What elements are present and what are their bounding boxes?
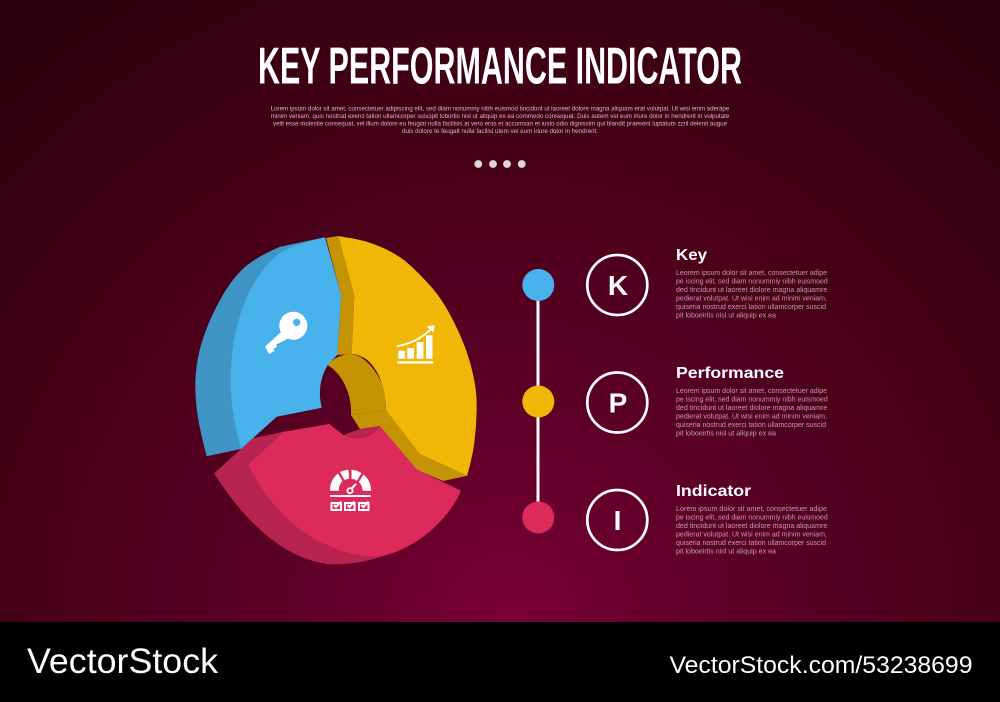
item: Indicator: pit loboeirtis nisl ut aliquip ex ea: [676, 548, 776, 556]
intro paragraph: velit esse molestie consequat, vel illum dolore eu feugiat nulla facilisis at vero eros et accumsan et iusto odio dignissim qui blandit praesent luptatum zzril delenit augue: [273, 120, 727, 127]
item: Key: K: [608, 270, 628, 301]
intro paragraph: duis dolore te feugait nulla facilisi utem vel eum iriure dolor in hendrerit.: [402, 128, 598, 135]
item: Indicator: pe iscing elit, sed diam nonummiy nibh euismoed: [676, 514, 828, 522]
segment: yellow performance: [326, 236, 477, 481]
item: Key: pit loboeirtis nisl ut aliquip ex ea: [676, 312, 776, 320]
timeline node: blue: [522, 269, 554, 301]
item: Indicator: Lorem ipsum dolor sit amet, consectetuer adipe: [676, 506, 827, 513]
item: Key: pe iscing elit, sed diam nonummiy nibh euismoed: [676, 278, 828, 286]
item: Indicator: I: [614, 505, 621, 536]
item: Key: ded tincidunt ut laoreet diolore magna aliquamre: [676, 287, 827, 294]
pagination dots: [474, 160, 526, 168]
timeline node: yellow: [522, 386, 554, 418]
footer bar: [0, 622, 1000, 702]
item: Performance: pe iscing elit, sed diam nonummiy nibh euismoed: [676, 396, 828, 404]
item: Key: [587, 247, 828, 320]
item: Performance: ded tincidunt ut laoreet diolore magna aliquamre: [676, 405, 827, 412]
item: Key: quiseria nostrud exerci tation ullamcorper suscid: [676, 304, 826, 311]
3D pie chart: [195, 236, 477, 564]
item: Performance: pedierat volutpat. Ut wisi enim ad minim veniam,: [676, 414, 827, 420]
item: Performance: quiseria nostrud exerci tation ullamcorper suscid: [676, 422, 826, 429]
item: Indicator: quiseria nostrud exerci tation ullamcorper suscid: [676, 540, 826, 547]
item: Performance: [587, 365, 828, 438]
item: Performance: P: [609, 388, 627, 418]
item: Key: Leorem ipsum dolor sit amet, consectetuer adipe: [676, 270, 827, 277]
item: Performance: Performance: [676, 365, 784, 382]
icon: gauge with checkboxes: [330, 470, 371, 510]
intro paragraph: minim veniam, quis nostrud exerci tation ullamcorper suscipit lobortis nisl ut aliquip ex ea commodo consequat. Duis autem vel eum iriure dolor in hendrerit in vulputate: [271, 113, 729, 120]
timeline node: red: [522, 502, 554, 534]
item: Indicator: [587, 483, 828, 556]
item: Performance: pit loboeirtis nisl ut aliquip ex ea: [676, 430, 776, 438]
footer bar: VectorStock: [27, 642, 219, 681]
item: Indicator: pedierat volutpat. Ut wisi enim ad minim veniam,: [676, 532, 827, 538]
item: Performance: Leorem ipsum dolor sit amet, consectetuer adipe: [676, 388, 827, 395]
item: Key: pedierat volutpat. Ut wisi enim ad minim veniam,: [676, 296, 827, 302]
segment: blue key: [195, 237, 341, 456]
item: Indicator: ded tincidunt ut laoreet diolore magna aliquamre: [676, 523, 827, 530]
intro paragraph: Lorem ipsum dolor sit amet, consectetuer adipiscing elit, sed diam nonummy nibh euismod tincidunt ut laoreet dolore magna aliquam erat volutpat. Ut wisi enim aderape: [271, 105, 729, 112]
icon: key: [265, 312, 307, 354]
timeline: [522, 269, 554, 534]
intro paragraph: [271, 105, 729, 135]
item: Indicator: Indicator: [676, 483, 751, 500]
icon: growth chart: [397, 325, 435, 364]
segment: red indicator: [214, 424, 461, 564]
item: Key: Key: [676, 247, 707, 264]
footer bar: VectorStock.com/53238699: [670, 652, 972, 679]
